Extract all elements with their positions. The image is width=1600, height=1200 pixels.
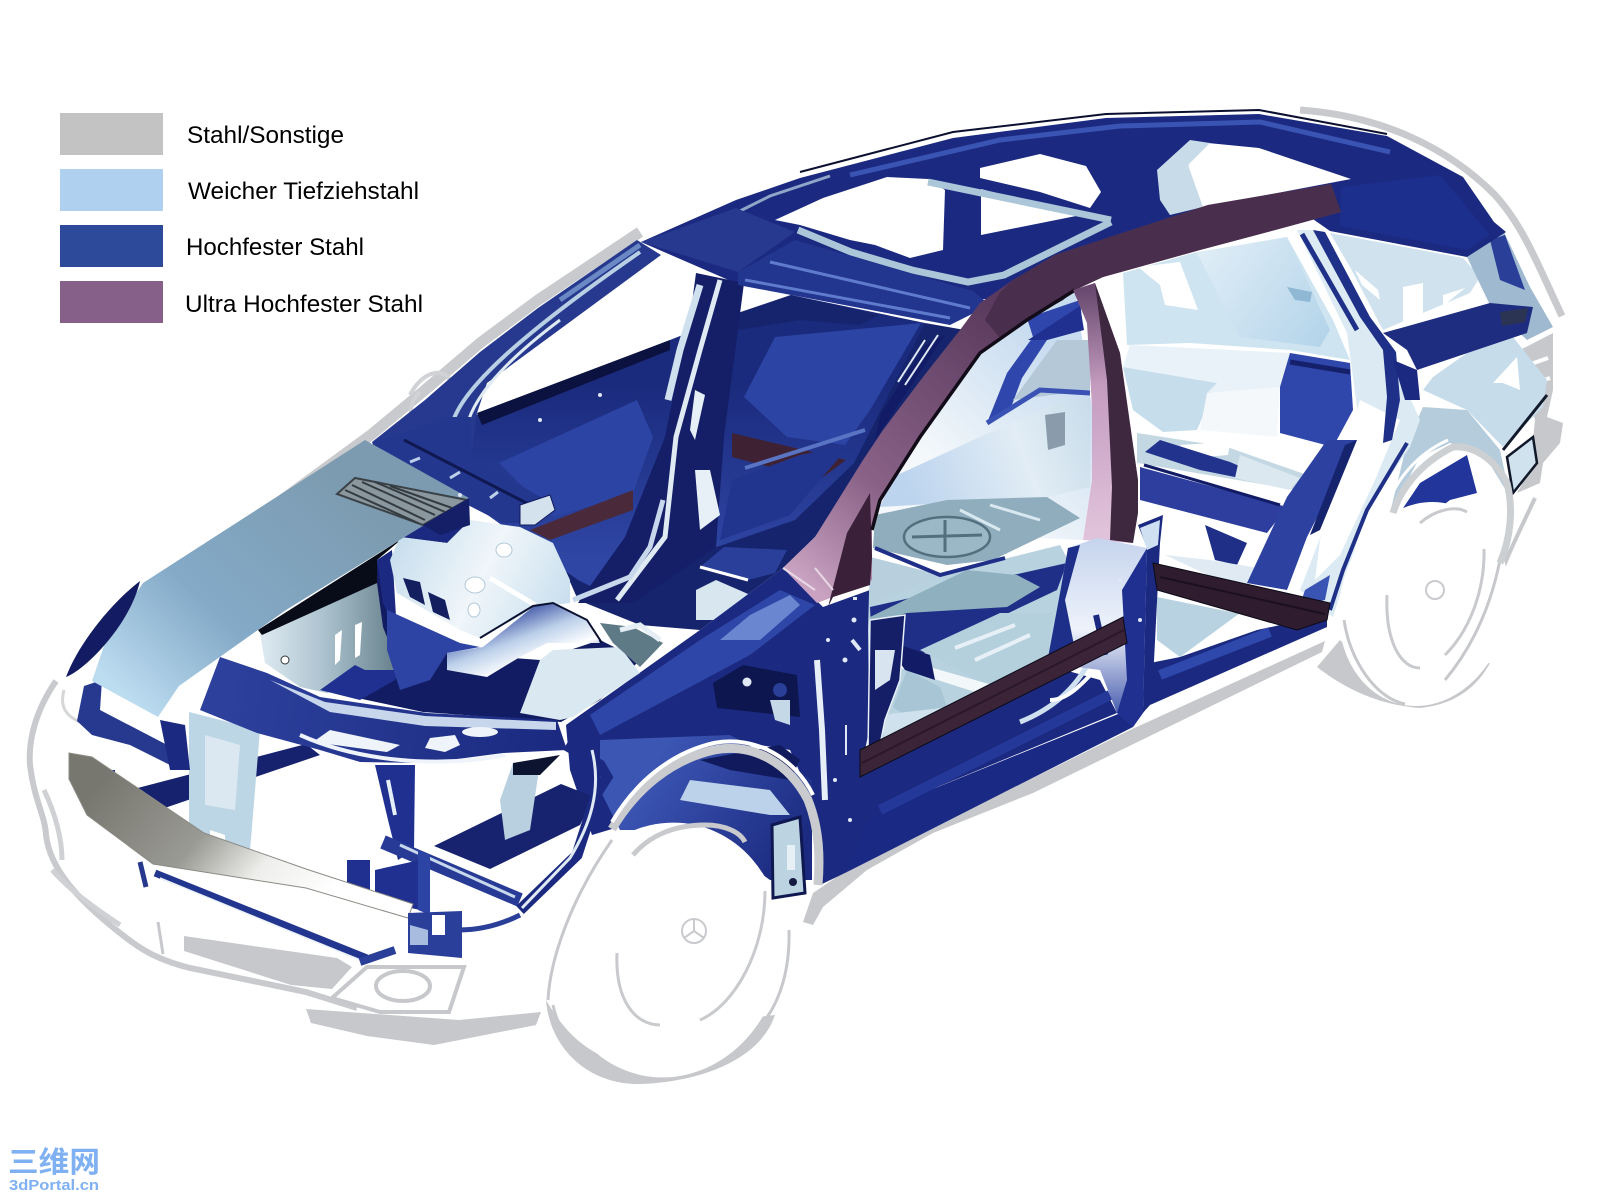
near longeron left [130, 744, 320, 812]
strut tower [447, 603, 600, 677]
near side impact beam front door [860, 617, 1127, 777]
fog lamp outline [332, 967, 464, 1012]
rear interior walls [1123, 237, 1353, 657]
front wheel [530, 801, 806, 1099]
legend item: Weicher Tiefziehstahl [60, 169, 419, 211]
side upper left [77, 680, 180, 770]
far side impact beam left [530, 490, 633, 540]
front bumper beam [69, 753, 413, 918]
cabin sky [872, 290, 1092, 540]
hood vent [337, 478, 467, 525]
near rear sill [1130, 615, 1327, 727]
legend item: Ultra Hochfester Stahl [60, 281, 423, 323]
watermark: 3dPortal.cn [9, 1177, 99, 1194]
inner fender far [260, 583, 400, 693]
near front body structure [566, 568, 870, 885]
front radiator frame [77, 657, 607, 930]
rear upper beam [1383, 303, 1533, 370]
vertical support [375, 765, 415, 860]
firewall lower ribbed band [387, 610, 480, 690]
rear seat back and C pillar [1247, 230, 1533, 617]
rear floor [1200, 430, 1327, 473]
interior seen through near front door window [872, 290, 1092, 565]
floor below crossmember [1205, 525, 1247, 565]
lower bumper struts [140, 862, 395, 962]
front wheel arch [612, 741, 819, 885]
roof opening front [775, 177, 945, 258]
near front door floor opening [868, 545, 1068, 780]
roof front header bar [738, 240, 990, 325]
legend item: Stahl/Sonstige: Stahl/Sonstige [187, 122, 344, 149]
roof opening middle upper [980, 154, 1101, 208]
fender bracket [772, 817, 805, 898]
rear blue box [1280, 353, 1353, 447]
cowl ridge [372, 417, 555, 525]
blue crossmember [1140, 467, 1287, 533]
bolts [458, 393, 1142, 822]
cabin floor [873, 497, 1080, 565]
B pillar lower box [1047, 515, 1163, 727]
legend item: Weicher Tiefziehstahl: Weicher Tiefziehstahl [188, 178, 419, 205]
cabin lower panel [880, 398, 1090, 507]
bay floor [320, 560, 640, 722]
far door panels [499, 400, 653, 517]
ring frame [520, 745, 607, 910]
bumper end bracket [408, 911, 462, 958]
silver roof bars [798, 182, 1111, 282]
far wheel arch [987, 300, 1083, 423]
legend [60, 113, 423, 323]
far lower bracket tray [696, 547, 787, 620]
roof opening middle lower [981, 189, 1081, 235]
near purple A pillar and roof rail [783, 184, 1341, 607]
cowl dark box [400, 513, 468, 543]
top rail [200, 657, 567, 763]
legend item: Stahl/Sonstige [60, 113, 344, 155]
far windshield frame [372, 240, 661, 460]
rear structure and quarter panels [1330, 230, 1553, 523]
far bay light shape [500, 763, 540, 840]
roof front panel [641, 208, 795, 272]
rear wheel arch [1388, 440, 1511, 563]
teal shadow [600, 623, 663, 667]
watermark: 三维网 [8, 1139, 100, 1181]
radiator panel [189, 712, 260, 851]
engine bay [258, 513, 663, 722]
hood left headlight lens [66, 581, 140, 677]
far longeron [434, 784, 594, 869]
roof opening rear [1188, 143, 1351, 207]
car illustration [30, 110, 1563, 1099]
car shell outline in grey [30, 110, 1563, 1045]
far side light pillar [1157, 140, 1210, 215]
strut dome [520, 647, 640, 720]
rear door floor [1157, 597, 1270, 657]
near side impact beam rear door [1153, 563, 1330, 630]
hood [66, 440, 470, 717]
firewall [390, 520, 570, 638]
legend item: Hochfester Stahl [60, 225, 364, 267]
hinge plate [713, 665, 800, 717]
hinge pillar highlights [817, 660, 825, 800]
legend item: Hochfester Stahl: Hochfester Stahl [186, 234, 364, 261]
far side door wall [471, 295, 945, 603]
A pillar dark inner strip [828, 493, 872, 607]
near sill and door bottom [840, 660, 1133, 872]
legend item: Ultra Hochfester Stahl: Ultra Hochfester Stahl [185, 291, 423, 318]
center brackets [347, 860, 420, 910]
purple B pillar [1073, 283, 1138, 543]
front fender inner and wheel well [600, 700, 812, 880]
rear wheel [1317, 484, 1530, 724]
lower brace [383, 842, 520, 900]
far sill line [720, 445, 850, 540]
far side impact beam right [732, 433, 846, 480]
roof frame [641, 110, 1506, 300]
far B pillar [573, 273, 744, 603]
far side body backing [553, 323, 965, 630]
